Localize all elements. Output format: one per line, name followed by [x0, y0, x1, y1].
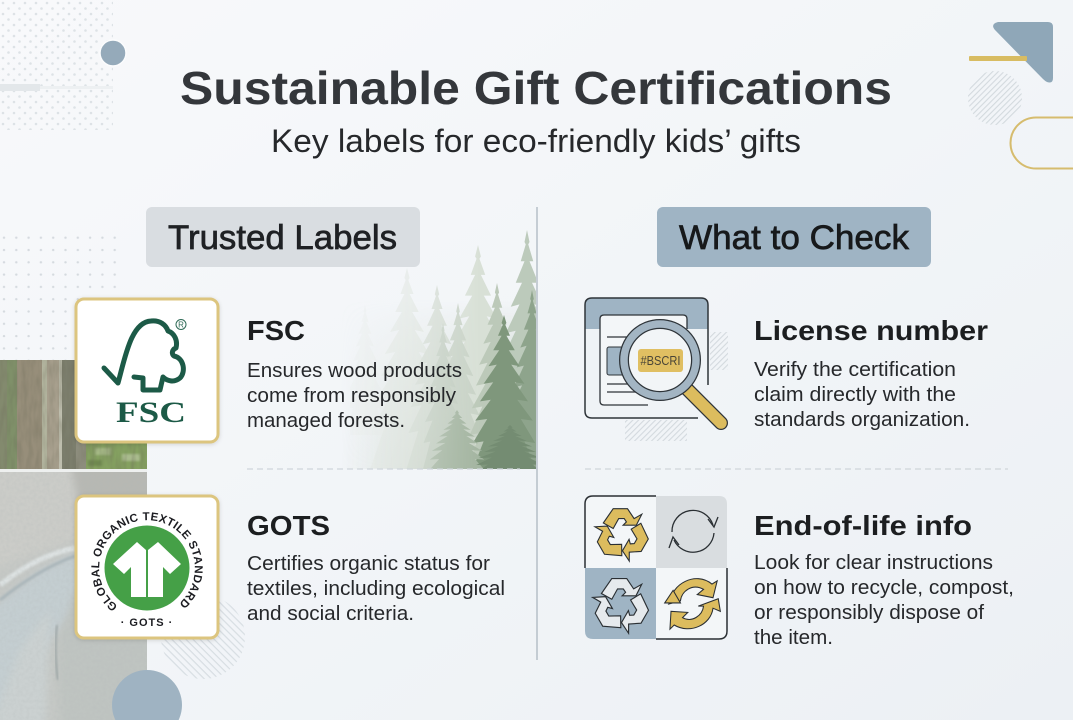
- photo seam: [0, 469, 147, 472]
- icon: gold cycle arrows: [665, 579, 720, 629]
- icon: magnifier over document: [585, 298, 728, 441]
- icon: green circle with shirt: [104, 526, 190, 610]
- End-of-life text block: [754, 510, 1014, 649]
- End-of-life text block: or responsibly dispose of: [754, 602, 984, 624]
- top right geometric decoration: [968, 22, 1073, 168]
- GOTS text block: textiles, including ecological: [247, 578, 505, 600]
- circular label text: GLOBAL ORGANIC TEXTILE STANDARD: [91, 512, 203, 610]
- heading pill: What to Check: [657, 207, 931, 267]
- FSC text block: FSC: [247, 315, 305, 346]
- FSC text block: managed forests.: [247, 410, 405, 432]
- heading pill: Trusted Labels: [146, 207, 420, 267]
- icon: FSC checkmark tree: [104, 321, 183, 390]
- registered mark: R: [178, 320, 184, 330]
- icon: magnifier over document: #BSCRI: [640, 353, 680, 368]
- FSC text block: Ensures wood products: [247, 360, 462, 382]
- End-of-life text block: the item.: [754, 627, 833, 649]
- subtitle: Key labels for eco-friendly kids’ gifts: [271, 123, 801, 159]
- End-of-life text block: End-of-life info: [754, 510, 972, 541]
- FSC wordmark: FSC: [116, 396, 186, 429]
- End-of-life text block: on how to recycle, compost,: [754, 577, 1014, 599]
- fabric photo strip: [0, 472, 147, 720]
- License number text block: [754, 315, 988, 431]
- GOTS small text: · GOTS ·: [121, 617, 173, 629]
- FSC text block: come from responsibly: [247, 385, 456, 407]
- icon: light recycle symbol: [588, 579, 654, 636]
- GOTS text block: [247, 510, 505, 625]
- icon: gold recycle symbol: [590, 509, 653, 564]
- decorative blue circle bottom: [112, 670, 182, 720]
- heading pill: Trusted Labels: Trusted Labels: [168, 219, 397, 257]
- registered mark: [176, 320, 186, 330]
- End-of-life text block: Look for clear instructions: [754, 552, 993, 574]
- title: Sustainable Gift Certifications: [180, 62, 892, 114]
- License number text block: standards organization.: [754, 409, 970, 431]
- forest photo strip: [0, 360, 147, 469]
- GOTS text block: Certifies organic status for: [247, 553, 490, 575]
- hatched circle near GOTS: [161, 595, 245, 679]
- card: FSC logo: [76, 299, 218, 442]
- forest illustration: [356, 230, 536, 469]
- dotted pattern top left: [0, 0, 113, 130]
- card: GOTS logo: [73, 494, 221, 642]
- License number text block: License number: [754, 315, 988, 346]
- License number text block: claim directly with the: [754, 384, 956, 406]
- decorative blue dot: [100, 40, 126, 66]
- icon: thin cycle arrows: [669, 510, 718, 552]
- icon: recycling grid: [585, 496, 727, 639]
- License number text block: Verify the certification: [754, 359, 956, 381]
- GOTS text block: and social criteria.: [247, 603, 414, 625]
- dotted pattern left: [0, 232, 120, 360]
- FSC text block: [247, 315, 462, 432]
- heading pill: What to Check: What to Check: [679, 219, 910, 257]
- GOTS text block: GOTS: [247, 510, 330, 541]
